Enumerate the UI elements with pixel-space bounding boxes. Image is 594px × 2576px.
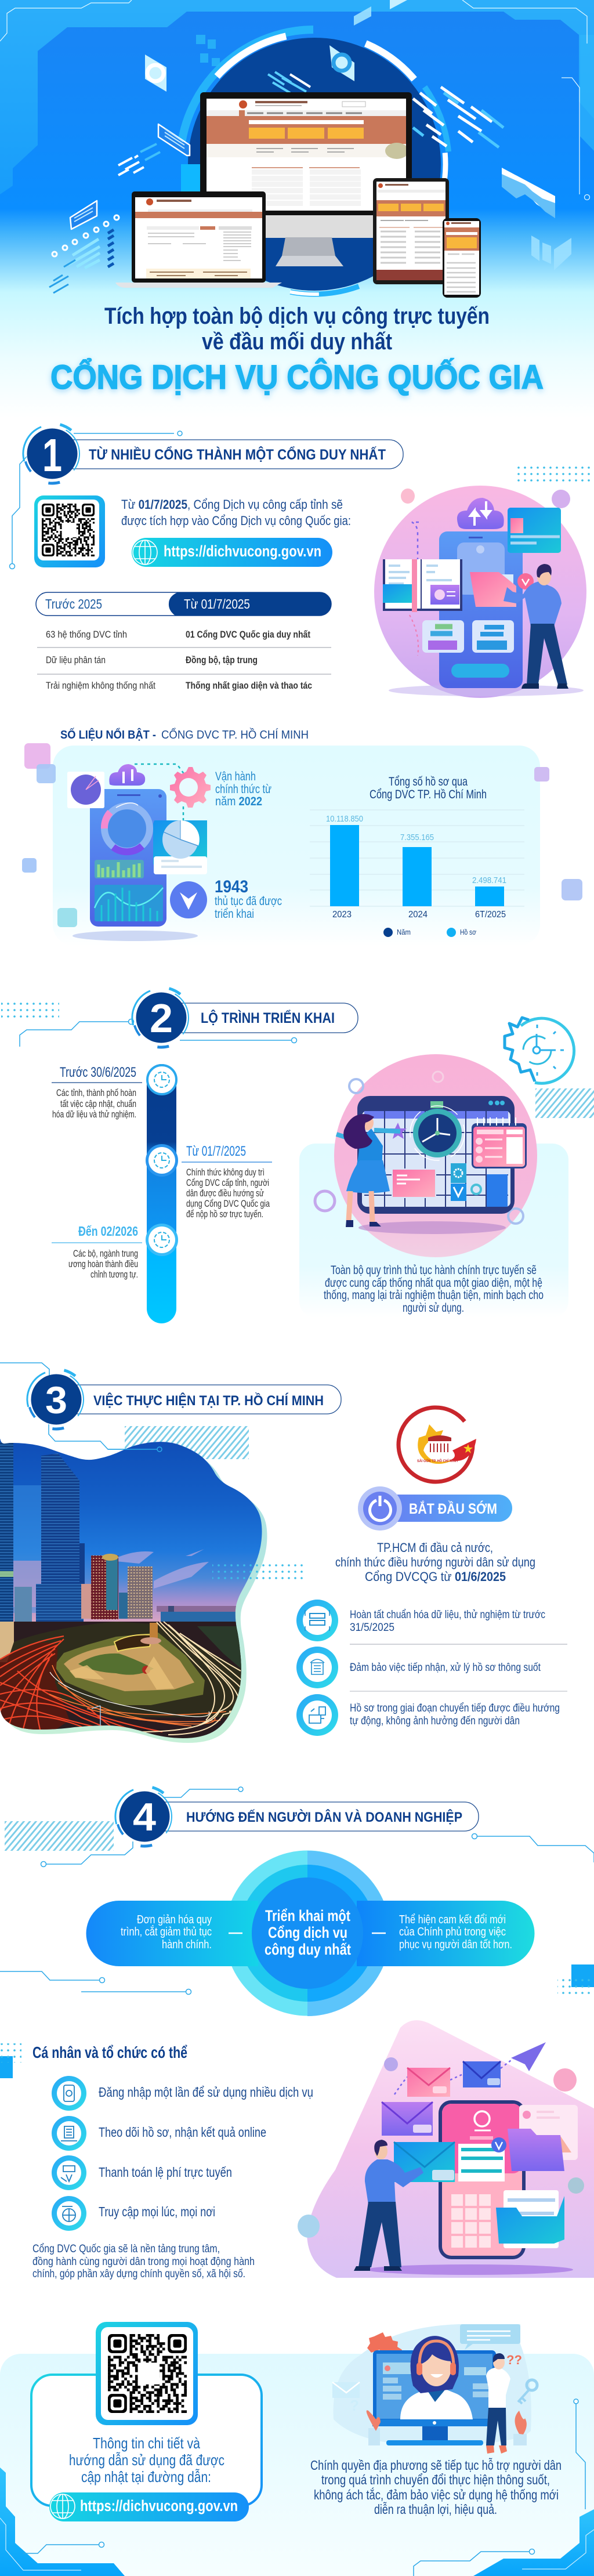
- bar chart: total records: 2.498.741: [472, 875, 506, 885]
- capabilities list: Thanh toán lệ phí trực tuyến: [99, 2165, 232, 2180]
- city photo: [0, 1439, 267, 1743]
- bar chart: total records: 6T/2025: [475, 910, 506, 920]
- title: về đầu mối duy nhất: [202, 329, 392, 354]
- central concept diagram: Thể hiện cam kết đổi mới: [399, 1913, 506, 1926]
- list: HCMC actions: [296, 1600, 567, 1736]
- central concept diagram: Triển khai một: [265, 1907, 350, 1924]
- section 3 heading: [0, 1360, 341, 1459]
- closing paragraph: chính, góp phần xây dựng chính quyền số, xã hội số.: [32, 2268, 245, 2280]
- info card with QR: Thông tin chi tiết và: [93, 2434, 200, 2452]
- phone mockup: [443, 218, 481, 298]
- early start button: [358, 1486, 512, 1531]
- URL button: [132, 538, 332, 567]
- URL button: https://dichvucong.gov.vn: [164, 542, 321, 560]
- section 4 heading: HƯỚNG ĐẾN NGƯỜI DÂN VÀ DOANH NGHIỆP: [186, 1809, 462, 1825]
- list: HCMC actions: Hoàn tất chuẩn hóa dữ liệu, thử nghiệm từ trước: [350, 1609, 545, 1621]
- milestone: by 02/2026: ương hoàn thành điều: [68, 1259, 138, 1269]
- title: CỔNG DỊCH VỤ CÔNG QUỐC GIA: [50, 359, 544, 396]
- QR code: [34, 495, 105, 567]
- info card with QR: [31, 2322, 262, 2506]
- central concept diagram: Cổng dịch vụ: [268, 1924, 347, 1941]
- footer URL button: https://dichvucong.gov.vn: [80, 2497, 238, 2515]
- comparison table: [36, 592, 331, 691]
- milestone: from 01/7/2025: [182, 1144, 272, 1220]
- closing paragraph: Cổng DVC Quốc gia sẽ là nền tảng trung tâm,: [32, 2243, 220, 2255]
- section 3 heading: 3: [45, 1379, 67, 1421]
- bar chart: total records: [310, 775, 524, 937]
- comparison table: Dữ liệu phân tán: [46, 654, 106, 665]
- list: HCMC actions: Đảm bảo việc tiếp nhận, xử lý hồ sơ thông suốt: [350, 1662, 541, 1674]
- section 2 heading: [1, 978, 358, 1057]
- section 4 heading: 4: [133, 1795, 156, 1839]
- milestone: before 30/6/2025: tất việc cập nhật, chuẩn: [60, 1099, 136, 1109]
- highlights heading: [60, 728, 309, 741]
- early start button: BẮT ĐẦU SỚM: [409, 1500, 497, 1517]
- bar chart: total records: 2024: [408, 910, 428, 920]
- milestone: before 30/6/2025: [52, 1065, 142, 1120]
- stat: operating since 2022: [215, 770, 271, 808]
- comparison table: 63 hệ thống DVC tỉnh: [46, 629, 127, 640]
- bar chart: total records: Năm: [397, 928, 411, 936]
- bar chart: total records: 10.118.850: [326, 814, 363, 824]
- section 3 heading: VIỆC THỰC HIỆN TẠI TP. HỒ CHÍ MINH: [93, 1392, 324, 1409]
- comparison table: Trải nghiệm không thống nhất: [46, 680, 155, 691]
- highlights panel: [22, 743, 582, 946]
- footer panel: [0, 2354, 594, 2576]
- stat: operating since 2022: Vận hành: [215, 770, 256, 783]
- section 2 heading: 2: [150, 996, 173, 1041]
- milestone: from 01/7/2025: Chính thức không duy trì: [186, 1167, 265, 1178]
- milestone: from 01/7/2025: để nộp hồ sơ trực tuyến.: [186, 1209, 263, 1220]
- integration text: [121, 497, 351, 528]
- bar chart: total records: Tổng số hồ sơ qua: [389, 775, 468, 788]
- capabilities heading: Cá nhân và tổ chức có thể: [32, 2043, 187, 2061]
- milestone: before 30/6/2025: Trước 30/6/2025: [60, 1065, 136, 1080]
- comparison table: Trước 2025: [45, 596, 102, 612]
- title: [50, 303, 544, 396]
- panel note: [324, 1264, 544, 1315]
- early start description: chính thức điều hướng người dân sử dụng: [335, 1555, 535, 1569]
- milestone: by 02/2026: chỉnh tương tự.: [90, 1269, 138, 1280]
- bar chart: total records: Hồ sơ: [460, 928, 476, 936]
- illustration: support agent: ??: [506, 2353, 522, 2367]
- milestone: by 02/2026: Các bộ, ngành trung: [73, 1249, 138, 1259]
- panel note: người sử dụng.: [403, 1301, 464, 1315]
- support note: diễn ra thuận lợi, hiệu quả.: [374, 2502, 497, 2517]
- section 1 heading: [9, 414, 403, 569]
- milestone: by 02/2026: [52, 1224, 142, 1280]
- list: HCMC actions: 31/5/2025: [350, 1622, 394, 1634]
- integration text: Từ 01/7/2025, Cổng Dịch vụ công cấp tỉnh sẽ: [121, 497, 343, 512]
- illustration: support agent: ?: [350, 2397, 359, 2414]
- timeline: [146, 1064, 178, 1323]
- stat: 1943 procedures: 1943: [215, 877, 248, 896]
- decorative circuit lines: [0, 1964, 594, 2078]
- tablet mockup: [373, 178, 449, 284]
- central concept diagram: Đơn giản hóa quy: [137, 1913, 212, 1926]
- bar chart: total records: 7.355.165: [400, 833, 434, 842]
- photo overlays: [108, 1447, 307, 1582]
- bar chart: total records: Cổng DVC TP. Hồ Chí Minh: [370, 788, 487, 801]
- comparison table: 01 Cổng DVC Quốc gia duy nhất: [186, 629, 310, 640]
- highlights heading: SỐ LIỆU NỔI BẬT -: [60, 728, 156, 741]
- comparison table: Đồng bộ, tập trung: [186, 654, 258, 665]
- comparison table: Từ 01/7/2025: [184, 596, 250, 612]
- early start description: [335, 1540, 535, 1584]
- milestone: before 30/6/2025: hóa dữ liệu và thử nghiệm.: [52, 1109, 136, 1120]
- monitor mockup: [200, 92, 412, 266]
- central concept diagram: trình, cắt giảm thủ tục: [121, 1925, 212, 1938]
- stat: operating since 2022: chính thức từ: [215, 783, 271, 796]
- milestone: before 30/6/2025: Các tỉnh, thành phố hoàn: [56, 1088, 136, 1098]
- clock gear icon: [505, 1018, 574, 1083]
- milestone: from 01/7/2025: dân được điều hướng sử: [186, 1188, 264, 1199]
- laptop mockup: [115, 191, 282, 288]
- milestone: from 01/7/2025: dụng Cổng DVC Quốc gia: [186, 1199, 270, 1209]
- early start description: Cổng DVCQG từ 01/6/2025: [365, 1569, 506, 1584]
- capabilities list: Đăng nhập một lần để sử dụng nhiều dịch vụ: [99, 2085, 313, 2100]
- central concept diagram: phục vụ người dân tốt hơn.: [399, 1938, 512, 1951]
- milestone: from 01/7/2025: Cổng DVC cấp tỉnh, người: [186, 1178, 269, 1188]
- section 1 heading: TỪ NHIỀU CỔNG THÀNH MỘT CỔNG DUY NHẤT: [89, 446, 386, 463]
- illustration: support agent: [332, 2324, 537, 2454]
- illustration: phone, books and user: [374, 464, 594, 698]
- central concept diagram: công duy nhất: [265, 1941, 351, 1958]
- early start description: TP.HCM đi đầu cả nước,: [377, 1540, 493, 1555]
- section 1 heading: 1: [42, 429, 62, 481]
- support note: [310, 2458, 562, 2517]
- closing paragraph: đồng hành cùng người dân trong mọi hoạt động hành: [32, 2256, 255, 2268]
- comparison table: Thống nhất giao diện và thao tác: [186, 680, 312, 691]
- section 2 heading: LỘ TRÌNH TRIỂN KHAI: [201, 1009, 335, 1026]
- stat: 1943 procedures: thủ tục đã được: [215, 895, 282, 908]
- stat: operating since 2022: năm 2022: [215, 795, 262, 808]
- info card with QR: hướng dẫn sử dụng đã được: [69, 2451, 224, 2469]
- milestone: from 01/7/2025: Từ 01/7/2025: [186, 1144, 246, 1159]
- highlights illustration: [67, 764, 211, 941]
- capabilities list: Theo dõi hồ sơ, nhận kết quả online: [99, 2125, 266, 2140]
- city emblem: [399, 1408, 476, 1482]
- panel: calendar illustration: [299, 1054, 594, 1318]
- title: Tích hợp toàn bộ dịch vụ công trực tuyến: [104, 303, 490, 329]
- footer URL button: [49, 2492, 249, 2521]
- integration text: được tích hợp vào Cổng Dịch vụ công Quốc gia:: [121, 513, 351, 528]
- highlights heading: CỔNG DVC TP. HỒ CHÍ MINH: [161, 728, 309, 741]
- closing paragraph: [32, 2243, 255, 2280]
- bar chart: total records: 2023: [332, 910, 352, 920]
- header background: [0, 0, 594, 418]
- milestone: by 02/2026: Đến 02/2026: [78, 1224, 138, 1239]
- section 4 heading: [5, 1777, 594, 1867]
- floating data graphics: [49, 6, 571, 293]
- central concept diagram: hành chính.: [162, 1938, 212, 1951]
- capabilities list: Truy cập mọi lúc, mọi nơi: [99, 2204, 215, 2219]
- illustration: mail and mobile: [298, 2020, 594, 2278]
- central concept diagram: của Chính phủ trong việc: [399, 1926, 506, 1938]
- info card with QR: cập nhật tại đường dẫn:: [81, 2468, 211, 2485]
- ring with central disc: [127, 0, 502, 352]
- stat: 1943 procedures: triển khai: [215, 907, 254, 921]
- capabilities list: [52, 2076, 313, 2231]
- list: HCMC actions: tự động, không ảnh hưởng đến người dân: [350, 1715, 520, 1727]
- stat: 1943 procedures: [215, 877, 282, 921]
- central concept diagram: [86, 1851, 535, 2016]
- city emblem: SÀI GÒN TP. HỒ CHÍ MINH: [417, 1459, 458, 1463]
